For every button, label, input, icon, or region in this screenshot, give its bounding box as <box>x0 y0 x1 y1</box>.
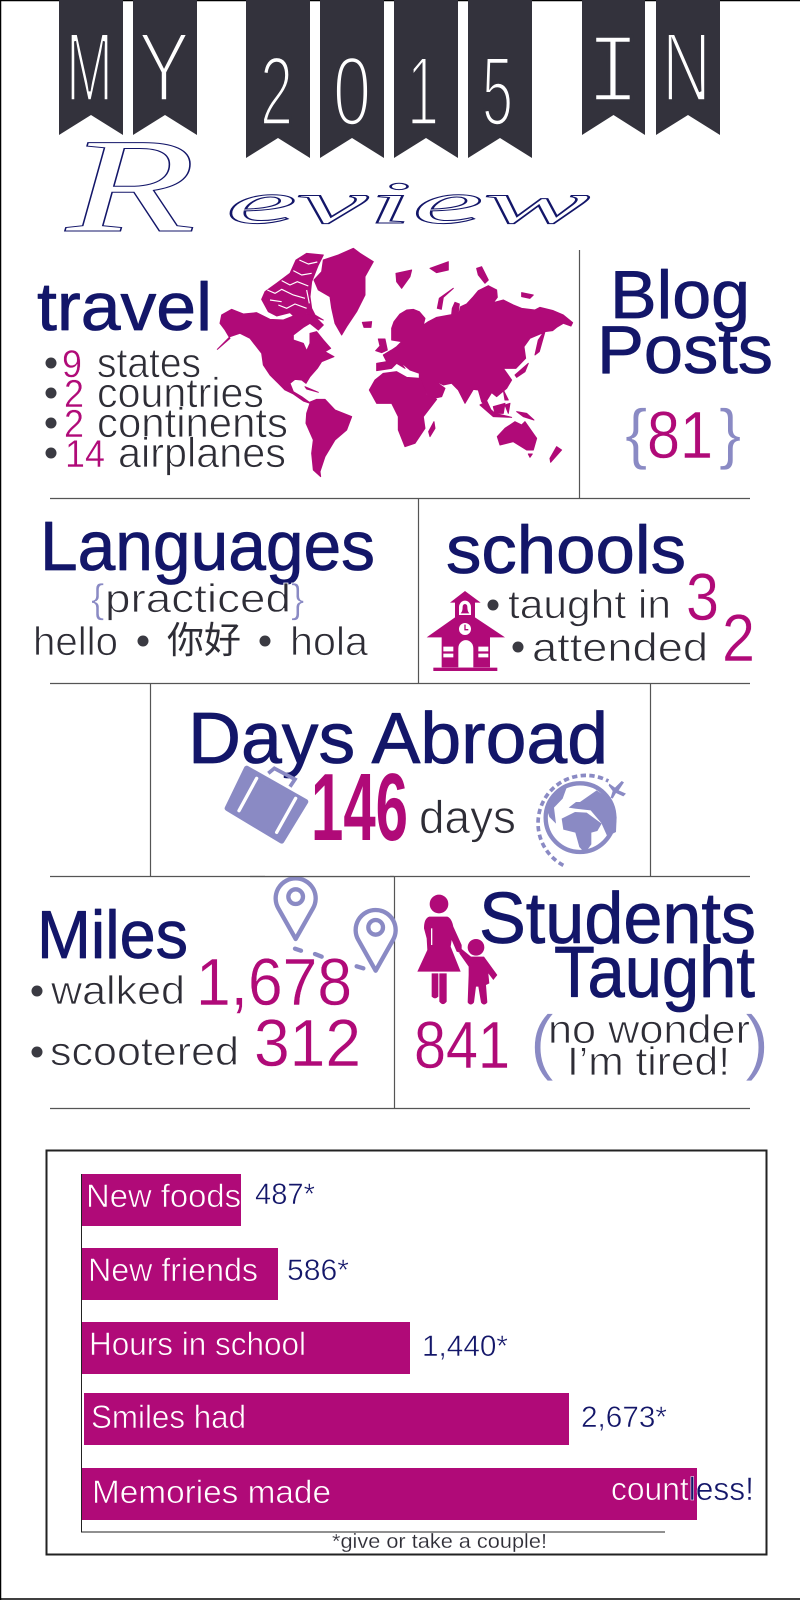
subheading: practiced: } <box>291 577 304 621</box>
bar: Memories made: countless! <box>611 1471 754 1507</box>
note: no wonder I'm tired: ) <box>745 1002 769 1082</box>
list: travel stats: 14 <box>65 433 105 476</box>
panel: miles <box>32 860 396 1081</box>
panel: languages <box>33 507 375 664</box>
stat: 146: 146 <box>311 754 408 861</box>
bar: Smiles had <box>84 1393 667 1445</box>
stat: 81: { <box>625 396 647 471</box>
heading: Days Abroad: Days Abroad <box>188 699 608 779</box>
heading: Blog Posts: Blog <box>610 257 750 333</box>
bar: New friends <box>82 1248 349 1300</box>
list: travel stats: 9 <box>62 343 82 386</box>
list: miles stats <box>32 945 361 1081</box>
list: travel stats <box>46 339 288 476</box>
panel dividers <box>50 250 750 1108</box>
list: travel stats: continents <box>97 399 288 446</box>
heading: Students Taught: Taught <box>554 933 755 1013</box>
bar chart <box>46 1150 766 1554</box>
heading: travel: travel <box>37 269 212 345</box>
panel: schools <box>427 512 755 676</box>
subheading: practiced: practiced <box>105 577 291 621</box>
bar: New foods: New foods <box>86 1178 241 1214</box>
list: miles stats: 1,678 <box>196 945 352 1020</box>
title banners: MY: M <box>66 12 113 122</box>
heading: Students Taught: Students <box>479 879 756 959</box>
heading: schools: schools <box>446 512 686 588</box>
bar: New foods <box>82 1174 315 1226</box>
list: miles stats: walked <box>50 969 185 1013</box>
stat: 81: } <box>719 396 741 471</box>
bar: Hours in school: Hours in school <box>89 1326 306 1362</box>
note: no wonder I'm tired: no wonder <box>548 1008 750 1052</box>
title banners: 2015: 2 <box>260 36 293 146</box>
panel: students taught <box>414 879 769 1084</box>
title banners: 2015: 1 <box>407 36 439 146</box>
bar: Hours in school <box>82 1322 508 1374</box>
icon: teacher and child <box>417 895 497 1004</box>
list: travel stats: states <box>97 339 201 386</box>
subheading: practiced: { <box>91 577 104 621</box>
greetings: hello <box>33 620 118 664</box>
panel: blog posts <box>597 257 773 473</box>
stat: 81: 81 <box>647 398 713 473</box>
panel: days abroad <box>188 699 626 865</box>
bar: Memories made: Memories made <box>92 1474 331 1510</box>
title banners: 2015 <box>246 0 532 158</box>
greetings <box>33 620 369 664</box>
icon: globe with plane <box>538 775 626 865</box>
heading: Languages: Languages <box>40 507 375 585</box>
bar: Hours in school: 1,440* <box>422 1330 508 1363</box>
icon: schoolhouse <box>427 591 505 671</box>
title script: Review: R <box>64 112 196 261</box>
footnote: *give or take a couple! <box>332 1531 547 1553</box>
list: school stats: taught in <box>508 583 671 627</box>
title banners: MY <box>59 0 197 135</box>
title banners: 2015: 0 <box>333 36 371 146</box>
bar: Memories made <box>82 1468 754 1520</box>
note: no wonder I'm tired: ( <box>530 1002 554 1082</box>
bar: New foods: 487* <box>255 1178 315 1211</box>
title banners: IN: N <box>662 12 711 122</box>
list: miles stats: 312 <box>254 1006 361 1081</box>
title banners: IN <box>582 0 720 135</box>
label: days: days <box>419 791 516 843</box>
icon: map pins and route <box>276 878 396 971</box>
list: school stats: attended <box>532 626 708 670</box>
title banners: MY: Y <box>138 12 190 122</box>
list: travel stats: countries <box>97 369 264 416</box>
bar: Smiles had: 2,673* <box>581 1401 667 1434</box>
greetings: hola <box>290 620 369 664</box>
list: travel stats: 2 <box>64 373 84 416</box>
list: travel stats: 2 <box>64 403 84 446</box>
greetings: 你好 <box>167 620 241 661</box>
list: travel stats: airplanes <box>118 429 286 476</box>
heading: Blog Posts: Posts <box>597 312 773 388</box>
chart frame <box>46 1150 766 1554</box>
note: no wonder I'm tired: I’m tired! <box>567 1040 730 1084</box>
list: school stats: 3 <box>686 560 719 635</box>
title banners: IN: I <box>586 20 640 131</box>
icon: world map <box>217 248 573 477</box>
list: miles stats: scootered <box>50 1030 239 1074</box>
bar: New friends: 586* <box>287 1254 349 1287</box>
stat: 841: 841 <box>414 1008 510 1083</box>
list: school stats <box>488 560 755 676</box>
bar: Smiles had: Smiles had <box>91 1399 246 1435</box>
bar: New friends: New friends <box>88 1252 258 1288</box>
panel: travel <box>37 269 288 476</box>
chart axes <box>82 1174 665 1532</box>
title script: Review: eview <box>226 170 590 236</box>
heading: Miles: Miles <box>37 897 188 973</box>
list: school stats: 2 <box>722 601 755 676</box>
title banners: 2015: 5 <box>482 36 513 146</box>
icon: suitcase <box>227 768 306 841</box>
